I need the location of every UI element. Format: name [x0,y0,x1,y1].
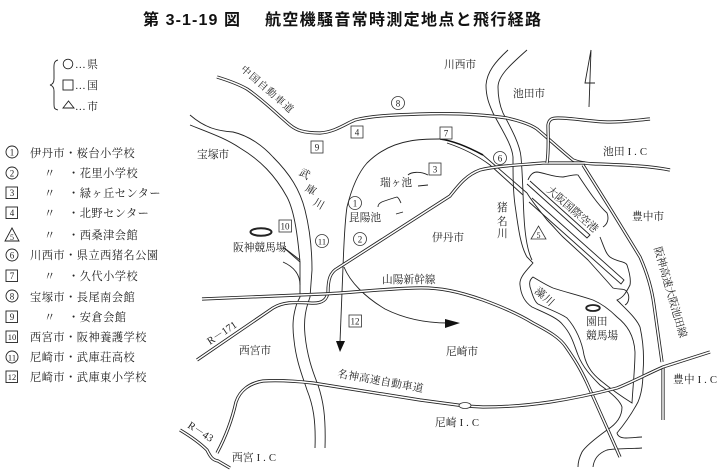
river: Inagawa [486,50,644,467]
place labels: 池田 I . C [603,145,647,158]
legend: measuring points list: 尼崎市・武庫荘高校 [30,350,136,364]
icon: north arrow [585,50,595,107]
legend: measuring points list: 10 [8,332,16,342]
place labels: 阪神競馬場 [233,241,287,254]
legend: measuring points list: 3 [10,188,15,198]
label: Hanshin expressway: 阪神高速大阪池田線 [651,245,690,339]
map markers [279,96,546,327]
place labels: 豊中 I . C [673,373,717,386]
title [143,10,541,29]
leader line: Hanshin racecourse [283,247,300,262]
flight path [343,139,527,267]
label: Chugoku expressway: 中国自動車道 [238,62,296,116]
legend: marker types: …国 [75,80,98,92]
airport boundary [527,172,629,305]
legend: measuring points list: ・久代小学校 [68,269,138,283]
legend: measuring points list [5,146,161,384]
place labels: 昆陽池 [349,211,381,224]
icon: Sonoda racecourse [586,305,600,311]
label: Mukogawa [297,166,326,212]
place labels: 川 [497,228,508,240]
title: 第 3-1-19 図 [143,10,240,29]
label: Mukogawa: 川 [311,197,326,212]
place labels: 瑞ヶ池 [380,176,412,189]
road: Hanshin expressway Ikeda line [583,165,663,420]
legend: measuring points list: 〃 [44,271,56,283]
legend: measuring points list: ・西桑津会館 [68,228,138,242]
label: Mukogawa: 武 [297,166,313,182]
map markers: 2 [358,234,362,244]
map markers: 11 [318,236,326,246]
road: Meishin expressway [217,352,710,453]
legend: measuring points list: 1 [10,148,14,158]
legend: measuring points list: 〃 [44,208,56,220]
title: 航空機騒音常時測定地点と飛行経路 [265,10,541,29]
place labels: 名 [497,215,508,228]
map markers: 1 [353,198,357,208]
label: Meishin expressway: 名神高速自動車道 [336,367,425,395]
label: Mukogawa: 庫 [303,182,319,198]
map markers: 4 [355,128,360,138]
place labels: 山陽新幹線 [382,273,436,286]
place labels: 宝塚市 [197,148,229,161]
place labels: 尼崎市 [446,345,478,358]
icon: Hanshin racecourse [250,228,272,236]
place labels: 競馬場 [586,329,618,342]
map markers: 12 [350,316,360,326]
legend: measuring points list: 2 [10,168,14,178]
road: Route 171 [197,163,585,360]
place labels: 猪 [497,201,508,214]
rail: Sanyo Shinkansen [202,288,620,457]
legend: measuring points list: 7 [10,271,15,281]
road: Chugoku expressway [217,77,670,170]
legend: measuring points list: 宝塚市・長尾南会館 [30,290,135,304]
label: Mokawa: 藻川 [532,285,557,309]
legend: measuring points list: ・安倉会館 [68,310,126,324]
legend: measuring points list: 尼崎市・武庫東小学校 [30,370,147,384]
legend: measuring points list: 西宮市・阪神養護学校 [30,330,147,344]
place labels: 池田市 [513,87,545,100]
map markers: 5 [536,231,540,240]
legend: marker types [50,59,98,113]
airport runways [527,181,624,284]
label: R-43: R－43 [185,420,215,445]
legend: measuring points list: 〃 [44,188,56,200]
place labels: 川西市 [444,58,476,71]
flight arrow: south [336,267,345,352]
legend: marker types: …県 [75,59,98,71]
place labels [197,58,717,464]
legend: measuring points list: ・緑ヶ丘センター [68,187,161,200]
ponds [378,172,428,214]
map markers: 3 [433,164,438,174]
legend: measuring points list: 9 [10,312,15,322]
map markers: 7 [444,128,449,138]
place labels: 園田 [586,316,607,328]
place labels: 豊中市 [632,210,664,223]
river island: Mokawa [530,277,635,403]
map markers: 10 [280,222,290,232]
map markers: 8 [396,98,401,108]
legend: measuring points list: 5 [10,233,14,242]
place labels: 西宮市 [239,344,271,357]
map markers: 6 [498,154,503,164]
legend: measuring points list: ・花里小学校 [68,166,138,180]
label: Osaka airport: 大阪国際空港 [544,183,601,235]
legend: marker types: …市 [75,100,98,113]
flight arrow: southeast [344,267,460,328]
place labels: 西宮 I . C [232,451,276,464]
road: Ikeda spur [547,118,650,163]
place labels: 伊丹市 [432,231,464,244]
place labels: 尼崎 I . C [435,416,479,429]
legend: measuring points list: 8 [10,292,15,302]
legend: measuring points list: 〃 [44,168,56,180]
legend: measuring points list: 伊丹市・桜台小学校 [30,146,136,160]
legend: measuring points list: 〃 [44,312,56,324]
legend: measuring points list: ・北野センター [68,207,149,220]
legend: measuring points list: 6 [10,250,15,260]
label: R-171: R－171 [206,320,239,347]
map markers: 9 [315,142,320,152]
legend: measuring points list: 4 [10,208,15,218]
road: Route 43 [180,430,230,468]
legend: measuring points list: 11 [8,352,16,362]
river: Mukogawa [190,115,325,448]
legend: measuring points list: 〃 [44,230,56,242]
legend: measuring points list: 川西市・県立西猪名公園 [30,248,159,262]
legend: measuring points list: 12 [8,372,16,382]
